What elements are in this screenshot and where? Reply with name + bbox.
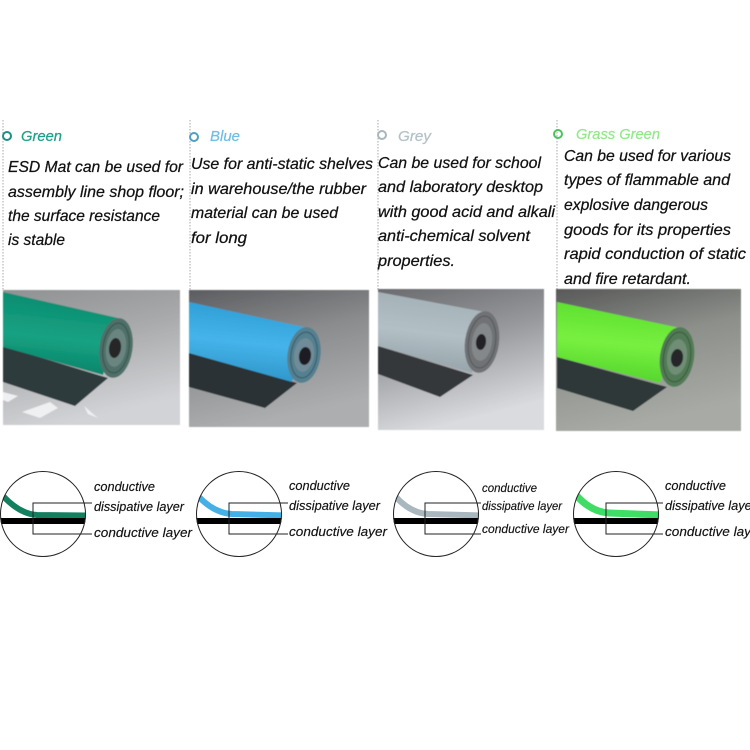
text: blue usage: in warehouse/the rubber bbox=[191, 181, 367, 198]
icon: grass green ring bbox=[554, 130, 562, 138]
text: green usage: the surface resistance bbox=[8, 208, 160, 225]
heading: Grass Green: Grass Green bbox=[576, 126, 660, 143]
text: green usage: is stable bbox=[8, 232, 65, 249]
text: grass green usage: types of flammable and bbox=[564, 172, 731, 189]
diagram: blue layers bbox=[196, 472, 388, 556]
heading: Grey: Grey bbox=[398, 128, 433, 145]
text: blue usage: material can be used bbox=[191, 205, 339, 222]
text: green usage: ESD Mat can be used for bbox=[8, 159, 184, 176]
text: grey usage: anti-chemical solvent bbox=[378, 228, 531, 245]
photo: green mat roll bbox=[3, 290, 180, 425]
photo: grass green mat roll bbox=[556, 289, 741, 431]
diagram: green layers bbox=[0, 472, 193, 556]
text: grass green usage: goods for its properties bbox=[564, 222, 731, 239]
icon: grey ring bbox=[378, 131, 386, 139]
text: grass green usage bbox=[564, 148, 746, 288]
text: grey usage: properties. bbox=[377, 253, 455, 270]
label: conductive layer: conductive layer bbox=[482, 524, 570, 536]
label: dissipative layer: dissipative layer bbox=[289, 499, 381, 513]
diagram: grey layers bbox=[393, 472, 570, 556]
text: grass green usage: explosive dangerous bbox=[564, 197, 708, 214]
column: blue description bbox=[190, 120, 373, 290]
label: conductive: conductive bbox=[289, 479, 350, 493]
text: grey usage: with good acid and alkali bbox=[378, 204, 555, 221]
column: green description bbox=[3, 120, 184, 290]
label: conductive: conductive bbox=[665, 479, 726, 493]
text: grey usage: and laboratory desktop bbox=[378, 179, 543, 196]
icon: blue ring bbox=[190, 133, 198, 141]
text: grey usage: Can be used for school bbox=[378, 155, 541, 172]
text: blue usage bbox=[191, 156, 373, 247]
label: dissipative layer: dissipative layer bbox=[482, 501, 563, 513]
text: green usage bbox=[8, 159, 184, 249]
text: blue usage: for long bbox=[191, 230, 247, 247]
text: grass green usage: rapid conduction of static bbox=[564, 246, 746, 263]
heading: Blue: Blue bbox=[210, 128, 240, 145]
label: conductive: conductive bbox=[94, 480, 155, 494]
label: conductive: conductive bbox=[482, 483, 537, 495]
photo: blue mat roll bbox=[189, 290, 369, 427]
text: grass green usage: Can be used for various bbox=[564, 148, 731, 165]
diagram: grass green layers bbox=[573, 472, 750, 556]
text: blue usage: Use for anti-static shelves bbox=[191, 156, 373, 173]
text: green usage: assembly line shop floor; bbox=[8, 184, 184, 201]
label: conductive layer: conductive layer bbox=[289, 525, 388, 539]
icon: green ring bbox=[3, 132, 11, 140]
photo: grey mat roll bbox=[378, 289, 544, 430]
label: conductive layer: conductive layer bbox=[94, 526, 193, 540]
heading: Green: Green bbox=[21, 128, 62, 145]
text: grey usage bbox=[377, 155, 555, 270]
text: grass green usage: and fire retardant. bbox=[564, 271, 691, 288]
column: grey description bbox=[377, 120, 555, 290]
label: dissipative layer: dissipative layer bbox=[94, 500, 185, 514]
column: grass green description bbox=[554, 120, 746, 290]
